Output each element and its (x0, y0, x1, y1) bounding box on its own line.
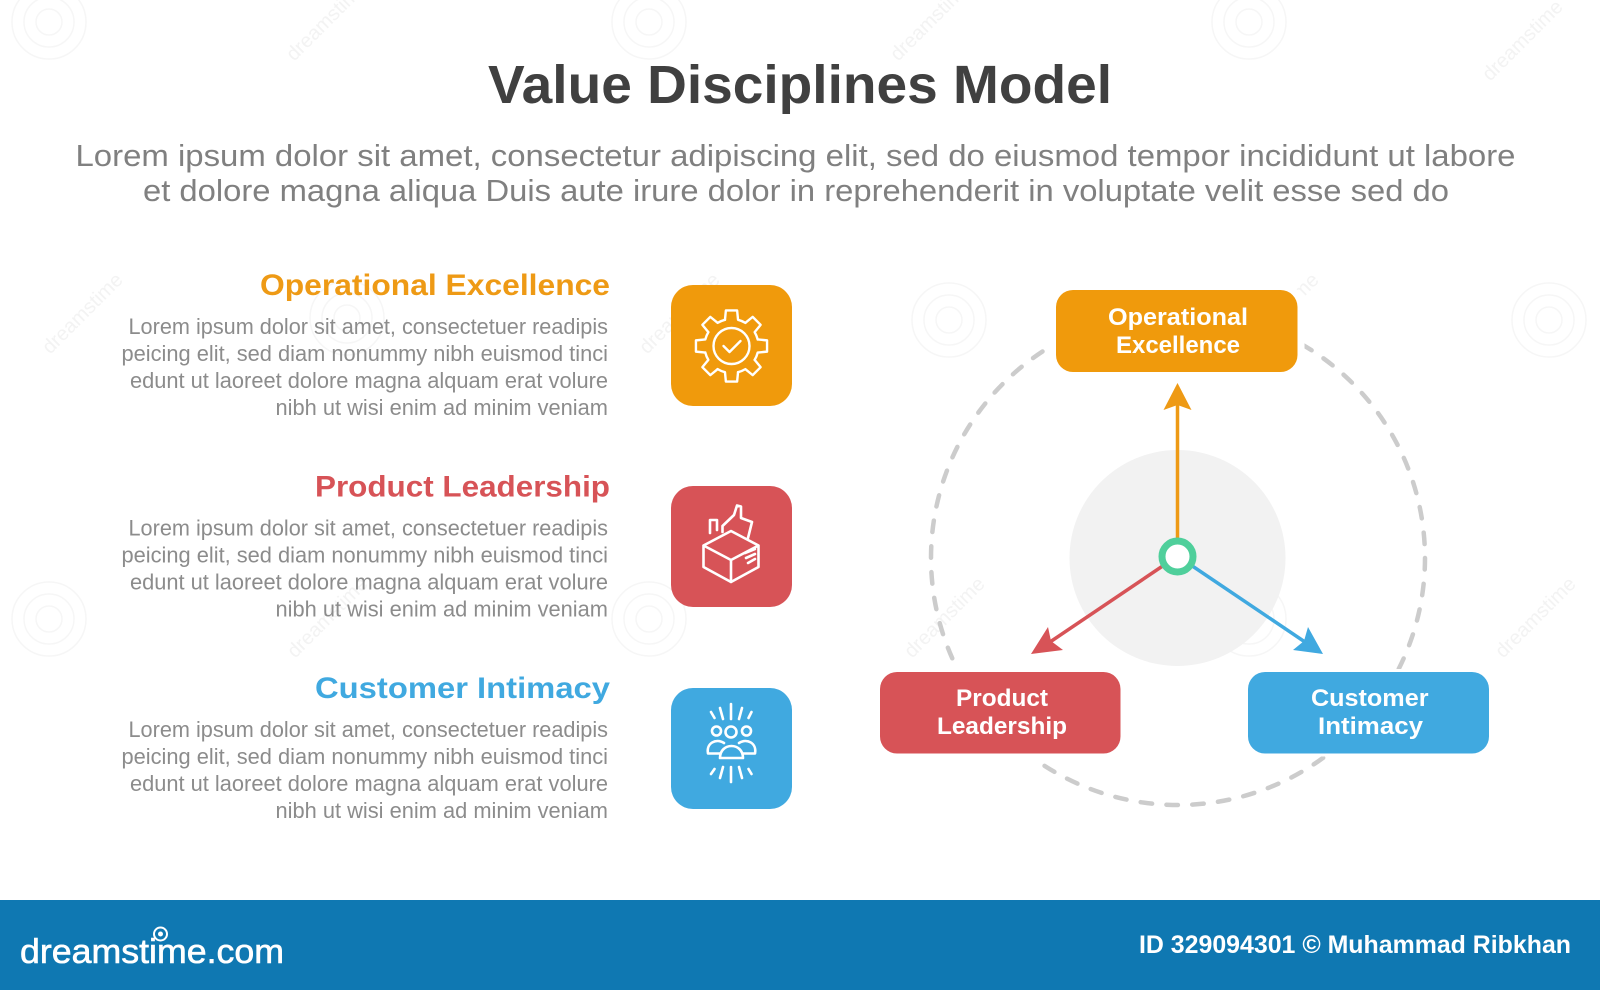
text: dreamstime (635, 269, 724, 358)
panel: operational excellence description (122, 269, 610, 420)
box: operational excellence (1056, 290, 1298, 372)
diagram: value disciplines cycle (880, 290, 1489, 805)
box: customer intimacy: Intimacy (1318, 713, 1424, 740)
body text: customer intimacy (122, 717, 608, 823)
arrow: to operational excellence (1164, 383, 1192, 556)
body text: operational excellence: nibh ut wisi enim ad minim veniam (276, 395, 608, 420)
body text: product leadership (122, 516, 608, 622)
footer logo: dreamstime.com (20, 933, 284, 971)
heading: product leadership: Product Leadership (315, 470, 610, 504)
arrow: to product leadership (1031, 556, 1178, 654)
dashed outer circle (931, 311, 1425, 805)
box: product leadership: Leadership (937, 713, 1067, 740)
body text: operational excellence: Lorem ipsum dolor sit amet, consectetuer readipis (128, 314, 608, 339)
text: dreamstime (1491, 573, 1580, 662)
heading: customer intimacy: Customer Intimacy (315, 672, 610, 705)
box: operational excellence: Excellence (1116, 332, 1240, 359)
title: Value Disciplines Model (488, 55, 1112, 115)
text: dreamstime (1234, 269, 1323, 358)
text: dreamstime (283, 573, 372, 662)
footer credit: ID 329094301 © Muhammad Ribkhan (1139, 931, 1571, 959)
body text: product leadership: nibh ut wisi enim ad minim veniam (276, 596, 608, 622)
body text: operational excellence (122, 314, 608, 420)
arrow: to customer intimacy (1178, 556, 1323, 654)
center ring node (1162, 541, 1193, 572)
icon tile: box with thumbs up (671, 486, 792, 607)
footer band (0, 900, 1600, 990)
heading: operational excellence: Operational Excellence (260, 269, 610, 302)
body text: customer intimacy: edunt ut laoreet dolore magna alquam erat volure (130, 771, 608, 796)
text: dreamstime (900, 573, 989, 662)
body text: product leadership: edunt ut laoreet dolore magna alquam erat volure (130, 570, 608, 594)
body text: operational excellence: edunt ut laoreet dolore magna alquam erat volure (130, 368, 608, 393)
body text: product leadership: peicing elit, sed diam nonummy nibh euismod tinci (122, 542, 608, 568)
text: dreamstime (38, 269, 127, 358)
subtitle text block: et dolore magna aliqua Duis aute irure dolor in reprehenderit in voluptate velit esse sed do (143, 173, 1449, 208)
icon tile: people group (671, 688, 792, 809)
body text: customer intimacy: peicing elit, sed diam nonummy nibh euismod tinci (122, 744, 608, 769)
panel: product leadership description (122, 470, 610, 622)
icon tile: gear with check (671, 285, 792, 406)
body text: customer intimacy: nibh ut wisi enim ad minim veniam (276, 798, 608, 823)
body text: customer intimacy: Lorem ipsum dolor sit amet, consectetuer readipis (128, 717, 608, 742)
panel: customer intimacy description (122, 672, 610, 823)
center gray disc (1070, 450, 1286, 666)
box: product leadership: Product (956, 685, 1048, 712)
body text: operational excellence: peicing elit, sed diam nonummy nibh euismod tinci (122, 341, 608, 366)
box: operational excellence: Operational (1108, 304, 1248, 331)
box: customer intimacy (1248, 672, 1489, 754)
box: product leadership (880, 672, 1120, 754)
subtitle text block: Lorem ipsum dolor sit amet, consectetur adipiscing elit, sed do eiusmod tempor incididunt ut labore (76, 138, 1515, 173)
body text: product leadership: Lorem ipsum dolor sit amet, consectetuer readipis (128, 516, 608, 540)
subtitle text block (76, 138, 1515, 208)
box: customer intimacy: Customer (1311, 685, 1428, 712)
